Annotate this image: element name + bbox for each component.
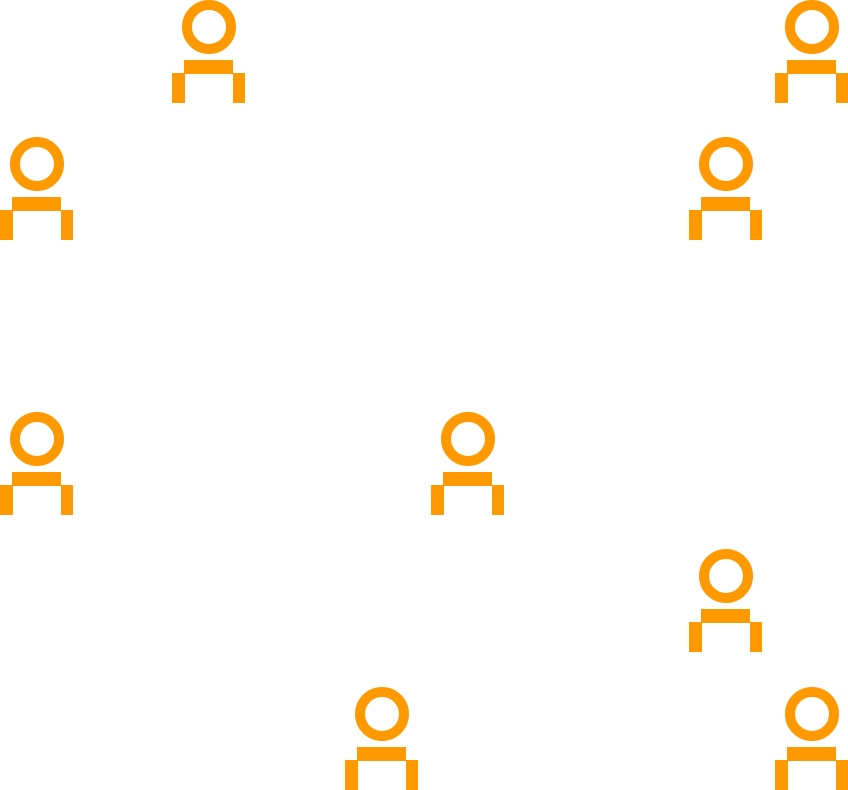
icon: person 4: [689, 142, 762, 240]
icon: person 6: [431, 417, 504, 515]
icon: person 1: [172, 5, 245, 103]
icon: person 2: [775, 5, 848, 103]
icon: person 3: [0, 142, 73, 240]
icon: person 8: [345, 692, 418, 790]
icon: person 5: [0, 417, 73, 515]
icon: person 7: [689, 554, 762, 652]
icon: person 9: [775, 692, 848, 790]
